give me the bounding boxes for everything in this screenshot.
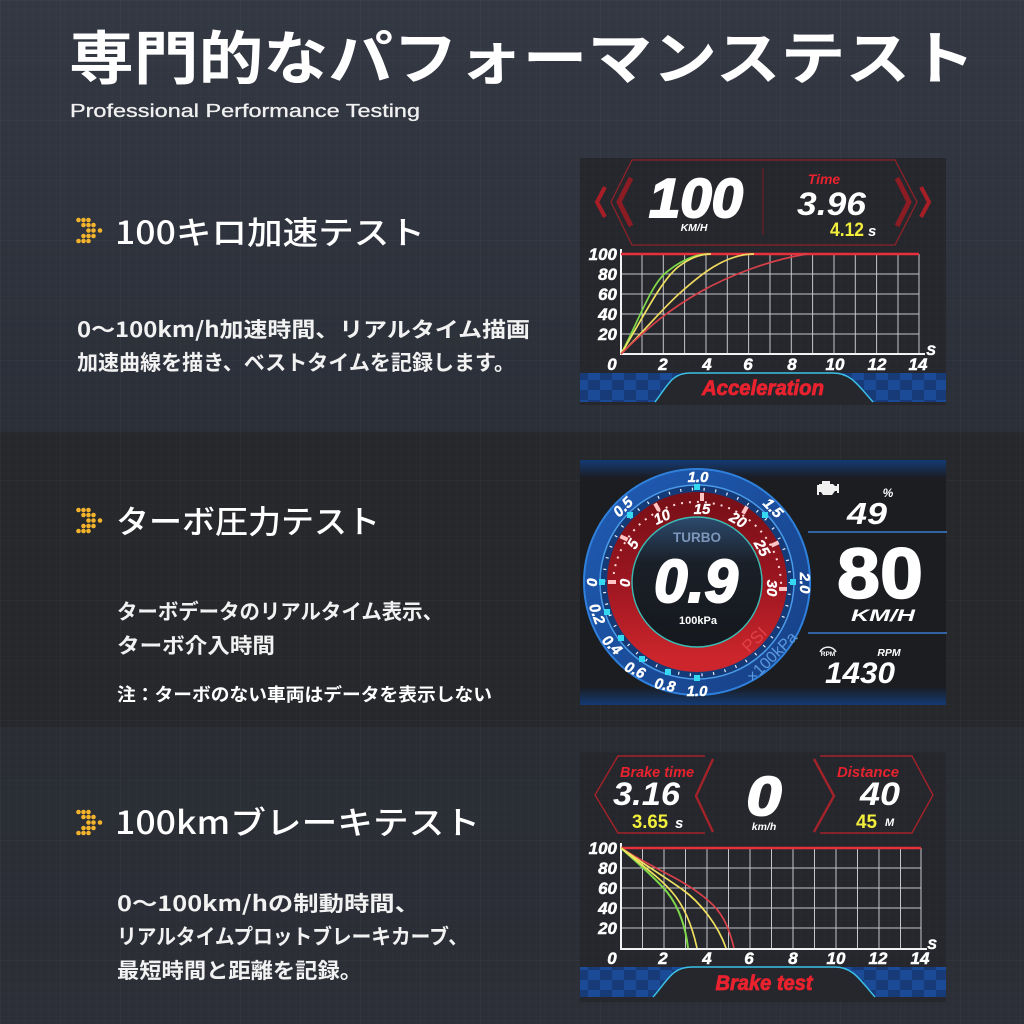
best brake time: 3.65 (632, 812, 668, 833)
icon: tachometer (820, 647, 836, 658)
speed readout: 100 (649, 167, 743, 229)
x axis labels: 8 (787, 355, 797, 374)
current time: 3.96 (797, 186, 866, 222)
outer scale labels: 2.0 (796, 572, 813, 594)
curve: red (621, 848, 734, 948)
footer band (580, 373, 946, 402)
outer scale labels: 0.2 (585, 601, 608, 627)
panel: acceleration screen (580, 158, 946, 405)
x axis labels: 4 (701, 355, 712, 374)
panel: brake screen (580, 752, 946, 1002)
x axis labels (607, 342, 936, 374)
icon: dotted arrow (76, 218, 102, 243)
outer scale labels: 1.0 (687, 683, 708, 700)
x axis labels: S (927, 936, 937, 952)
description: ターボ介入時間 (117, 630, 275, 660)
y axis labels: 60 (598, 879, 618, 898)
speed unit: km/h (752, 821, 776, 833)
x axis labels: S (926, 342, 936, 358)
x axis labels: 12 (868, 355, 887, 374)
distance label: Distance (837, 764, 899, 781)
x axis labels: 8 (788, 949, 798, 968)
boost scale labels: 20 (725, 508, 750, 532)
heading: 100キロ加速テスト (115, 208, 425, 254)
section: turbo text (76, 497, 492, 707)
note: 注：ターボのない車両はデータを表示しない (117, 681, 492, 707)
icon: engine (817, 481, 839, 495)
curve: green (621, 848, 688, 948)
outer scale labels (583, 469, 813, 700)
x axis labels: 14 (909, 355, 928, 374)
brake time label: Brake time (620, 764, 694, 781)
curve: yellow fast (621, 254, 711, 354)
distance value: 40 (859, 776, 900, 812)
description: 加速曲線を描き、ベストタイムを記録します。 (77, 347, 515, 377)
gauge unit: 100kPa (679, 615, 718, 627)
panel: turbo screen (580, 460, 947, 705)
chart (589, 839, 937, 968)
gauge value: 0.9 (654, 548, 739, 615)
x axis labels: 0 (607, 949, 617, 968)
description: リアルタイムプロットブレーキカーブ、 (117, 921, 468, 951)
outer scale labels: 1.0 (688, 469, 709, 486)
rpm value: 1430 (825, 657, 895, 690)
boost scale labels: 25 (750, 536, 773, 560)
boost scale labels: 30 (763, 580, 780, 597)
description: 最短時間と距離を記録。 (117, 955, 362, 985)
x axis labels: 0 (607, 355, 617, 374)
best time: 4.12 (830, 220, 864, 241)
description: ターボデータのリアルタイム表示、 (117, 596, 443, 626)
heading: 100kmブレーキテスト (115, 798, 480, 844)
title: 専門的なパフォーマンステスト (69, 12, 975, 96)
speed value: 80 (837, 535, 923, 614)
y axis labels: 60 (598, 285, 618, 304)
boost scale labels: 10 (651, 506, 674, 529)
y axis labels: 100 (589, 245, 618, 264)
x axis labels: 2 (657, 355, 668, 374)
outer scale labels: 0 (583, 578, 600, 587)
boost scale labels: 5 (624, 536, 643, 552)
footer band: Acceleration (701, 377, 824, 400)
brake time unit: s (675, 815, 683, 832)
x axis labels: 2 (657, 949, 668, 968)
divider (808, 632, 947, 634)
subtitle: Professional Performance Testing (70, 101, 420, 121)
rpm label: RPM (877, 647, 901, 659)
y axis labels: 80 (598, 265, 618, 284)
distance unit: M (885, 817, 895, 829)
icon: dotted arrow (76, 508, 102, 533)
speed unit: KM/H (681, 222, 708, 234)
y axis labels (589, 245, 618, 344)
x axis labels: 10 (827, 949, 846, 968)
outer scale labels: 0.8 (653, 675, 678, 696)
curve: yellow slow (621, 848, 726, 948)
boost scale labels: 0 (617, 578, 634, 587)
chart (589, 245, 936, 374)
x axis labels: 6 (744, 949, 754, 968)
header frame (597, 160, 929, 245)
x axis labels: 6 (743, 355, 753, 374)
outer scale labels: 1.5 (759, 495, 786, 522)
y axis labels: 40 (597, 305, 618, 324)
y axis labels (589, 839, 618, 938)
curve: red (621, 254, 807, 354)
gauge title: TURBO (673, 529, 721, 545)
time label: Time (808, 171, 840, 187)
y axis labels: 80 (598, 859, 618, 878)
description (77, 314, 530, 377)
x axis labels: 12 (869, 949, 888, 968)
red ring markers (608, 493, 787, 591)
brake time value: 3.16 (613, 776, 680, 812)
curve: yellow fast (621, 848, 697, 948)
outer scale labels: 0.4 (598, 632, 625, 659)
divider (808, 531, 947, 533)
outer scale labels: 0.5 (610, 494, 637, 521)
description: 0〜100km/hの制動時間、 (117, 888, 420, 918)
kPa multiplier: ×100kPa (744, 629, 801, 686)
cyan markers (599, 484, 796, 681)
heading: ターボ圧力テスト (116, 497, 380, 543)
y axis labels: 20 (597, 325, 618, 344)
description (117, 888, 468, 985)
outer scale labels: 0.6 (622, 658, 648, 683)
curve: yellow slow (621, 254, 754, 354)
PSI label: PSI (738, 623, 771, 656)
boost scale labels (617, 501, 780, 597)
speed unit: KM/H (851, 606, 916, 625)
y axis labels: 40 (597, 899, 618, 918)
speed readout: 0 (746, 765, 782, 827)
section: brake text (76, 798, 480, 985)
y axis labels: 20 (597, 919, 618, 938)
icon: dotted arrow (76, 810, 102, 835)
footer band: Brake test (716, 972, 813, 995)
boost scale labels: 15 (694, 501, 711, 518)
x axis labels (607, 936, 937, 968)
best time unit: s (868, 223, 876, 240)
y axis labels: 100 (589, 839, 618, 858)
section: acceleration text (76, 208, 530, 377)
throttle value: 49 (846, 496, 888, 531)
best distance: 45 (856, 812, 877, 833)
gauge (583, 469, 813, 700)
footer band (580, 967, 946, 997)
description (117, 596, 443, 660)
throttle unit: % (883, 486, 894, 500)
x axis labels: 10 (826, 355, 845, 374)
header frames (595, 756, 933, 833)
x axis labels: 4 (701, 949, 712, 968)
curve: green (621, 254, 709, 354)
description: 0〜100km/h加速時間、リアルタイム描画 (77, 314, 530, 344)
icon: tachometer: RPM (821, 651, 835, 658)
x axis labels: 14 (911, 949, 930, 968)
